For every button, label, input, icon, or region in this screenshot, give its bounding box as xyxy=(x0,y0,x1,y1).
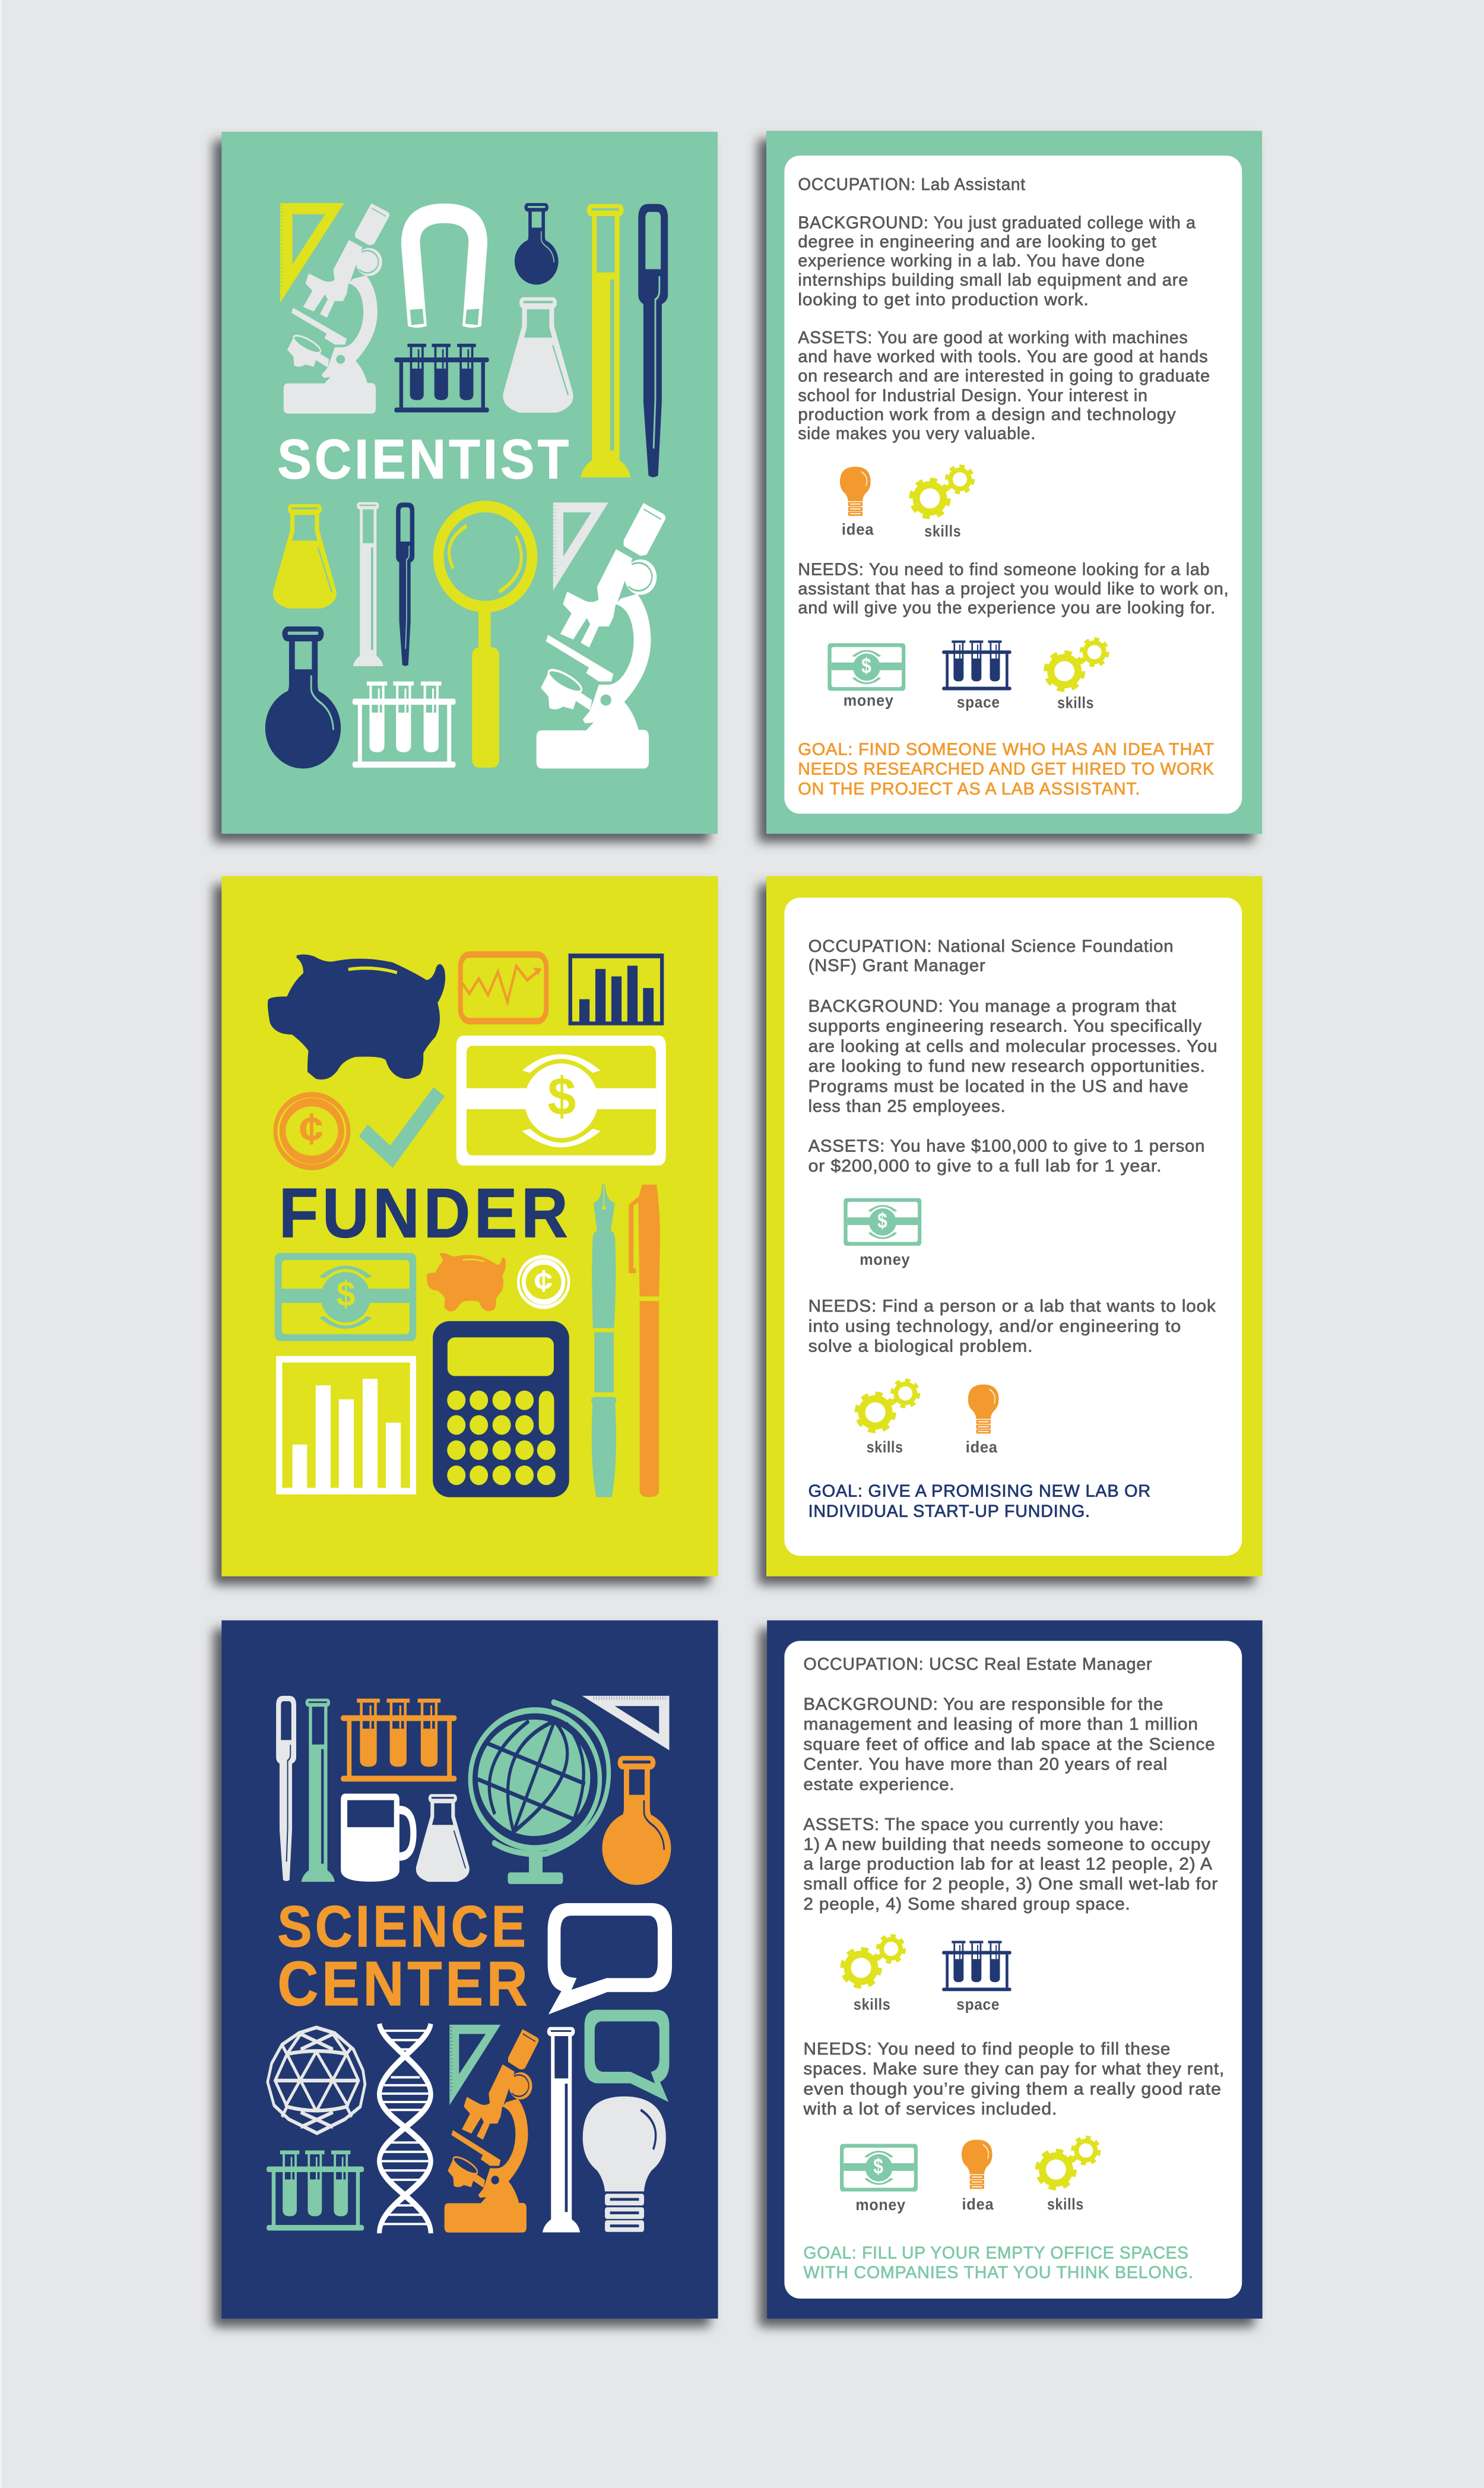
icon: money: $ xyxy=(877,1208,887,1233)
text block: occupation and background: (NSF) Grant Manager xyxy=(808,957,986,976)
text block: assets: side makes you very valuable. xyxy=(798,425,1036,444)
text block: occupation and background: internships building small lab equipment and are xyxy=(798,271,1188,290)
icon: small navy pipette xyxy=(396,502,414,666)
label: money: money xyxy=(844,691,894,709)
text block: needs: solve a biological problem. xyxy=(808,1338,1033,1356)
icon: teal bill xyxy=(275,1253,416,1341)
icon: teal bill: $ xyxy=(337,1274,355,1314)
icon: white microscope xyxy=(537,503,665,768)
text block: assets: ASSETS: You are good at working with machines xyxy=(798,329,1188,347)
text block: occupation and background: degree in engineering and are looking to get xyxy=(798,233,1157,251)
panel: science center role card xyxy=(759,1620,1263,2327)
text block: assets xyxy=(804,1816,1218,1914)
text block: occupation and background: OCCUPATION: UCSC Real Estate Manager xyxy=(804,1655,1152,1674)
label: idea: idea xyxy=(962,2195,994,2213)
icon: orange microscope xyxy=(445,2029,539,2233)
icon: orange coin xyxy=(275,1095,348,1167)
icon: magnifying glass xyxy=(433,501,537,768)
text block: occupation and background: OCCUPATION: Lab Assistant xyxy=(798,176,1026,194)
icon: small navy round flask xyxy=(515,203,559,284)
text block: occupation and background xyxy=(808,938,1218,1116)
icon: grey erlenmeyer flask xyxy=(416,1794,470,1882)
icon: marker xyxy=(629,1185,660,1497)
text block: needs: assistant that has a project you would like to work on, xyxy=(798,580,1229,599)
icon: lime set square xyxy=(280,203,344,303)
icon: money xyxy=(840,2144,918,2192)
text block: occupation and background: management and leasing of more than 1 million xyxy=(804,1715,1198,1734)
label: skills: skills xyxy=(867,1438,903,1456)
icon: grey erlenmeyer flask xyxy=(503,297,573,413)
text block: needs: with a lot of services included. xyxy=(803,2100,1057,2119)
icon: space rack xyxy=(942,641,1011,690)
icon: navy bar chart xyxy=(569,954,664,1025)
icon: teal graduated cylinder xyxy=(302,1699,335,1882)
text block: needs xyxy=(803,2040,1225,2119)
icon: orange piggy bank xyxy=(427,1253,506,1312)
panel: science center cover card xyxy=(214,1620,718,2327)
panel: funder cover card xyxy=(214,876,718,1585)
text block: occupation and background: supports engineering research. You specifically xyxy=(808,1018,1202,1036)
title: FUNDER xyxy=(279,1174,572,1252)
label: skills: skills xyxy=(1057,694,1094,711)
text block: goal: NEEDS RESEARCHED AND GET HIRED TO WORK xyxy=(798,761,1215,778)
text block: occupation and background: BACKGROUND: You just graduated college with a xyxy=(798,214,1196,232)
icon: skills gears xyxy=(1038,2138,1098,2188)
text block: assets: ASSETS: The space you currently you have: xyxy=(804,1816,1164,1834)
text block: assets: production work from a design and technology xyxy=(798,406,1176,424)
text block: needs: NEEDS: Find a person or a lab that wants to look xyxy=(808,1297,1216,1316)
label: space: space xyxy=(957,694,1000,711)
icon: money xyxy=(827,643,905,691)
label: skills: skills xyxy=(1047,2195,1084,2213)
text block: occupation and background: are looking at cells and molecular processes. You xyxy=(808,1037,1218,1056)
icon: idea bulb xyxy=(840,467,871,516)
icon: navy pipette xyxy=(638,204,668,477)
icon: white bill xyxy=(456,1036,666,1166)
text block: occupation and background: Programs must be located in the US and have xyxy=(808,1078,1189,1096)
text block: assets: 2 people, 4) Some shared group space. xyxy=(804,1895,1131,1914)
text block: assets: and have worked with tools. You are good at hands xyxy=(798,348,1208,366)
icon: money xyxy=(844,1198,921,1246)
icon: white bar chart xyxy=(276,1356,416,1495)
text block: occupation and background: estate experience. xyxy=(804,1775,955,1794)
icon: navy piggy bank xyxy=(268,954,445,1080)
text block: occupation and background: experience working in a lab. You have done xyxy=(798,252,1145,271)
icon: teal speech bubble xyxy=(585,2010,670,2102)
panel: scientist role card xyxy=(758,131,1262,842)
text block: goal: GOAL: FILL UP YOUR EMPTY OFFICE SPACES xyxy=(804,2245,1189,2262)
icon: teal test tube rack xyxy=(267,2151,364,2230)
label: money: money xyxy=(860,1251,910,1268)
icon: large navy round flask xyxy=(265,626,341,768)
icon: skills gears xyxy=(858,1381,918,1430)
icon: lime erlenmeyer flask xyxy=(273,504,337,609)
text block: needs xyxy=(798,561,1229,618)
text block: needs: NEEDS: You need to find someone looking for a lab xyxy=(798,561,1210,580)
icon: globe xyxy=(470,1702,608,1884)
text block: goal: GOAL: FIND SOMEONE WHO HAS AN IDEA THAT xyxy=(798,741,1215,759)
panel: funder role card xyxy=(758,876,1263,1585)
label: skills: skills xyxy=(854,1996,890,2013)
text block: assets: small office for 2 people, 3) One small wet-lab for xyxy=(804,1875,1218,1894)
text block: occupation and background: square feet of office and lab space at the Science xyxy=(804,1736,1216,1754)
icon: pipette xyxy=(276,1696,296,1881)
text block: needs: spaces. Make sure they can pay for what they rent, xyxy=(804,2060,1225,2079)
icon: grey light bulb xyxy=(583,2097,666,2232)
label: money: money xyxy=(855,2196,906,2214)
icon: navy test tube rack xyxy=(394,344,489,413)
text block: assets: 1) A new building that needs someone to occupy xyxy=(804,1836,1210,1854)
text block: needs: into using technology, and/or engineering to xyxy=(808,1318,1181,1336)
text block: occupation and background: less than 25 employees. xyxy=(808,1098,1006,1116)
text block: assets: a large production lab for at least 12 people, 2) A xyxy=(804,1856,1213,1873)
icon: space rack xyxy=(942,1941,1011,1991)
icon: orange test tube rack xyxy=(341,1699,456,1781)
icon: white speech bubble xyxy=(548,1903,672,2014)
label: idea: idea xyxy=(842,521,874,538)
text block: occupation and background: OCCUPATION: National Science Foundation xyxy=(808,938,1174,956)
icon: money: $ xyxy=(873,2154,883,2179)
text block: assets: school for Industrial Design. Your interest in xyxy=(798,387,1148,405)
icon: grey set square xyxy=(582,1696,670,1751)
icon: line chart xyxy=(461,954,546,1021)
text block: assets: or $200,000 to give to a full lab for 1 year. xyxy=(808,1157,1162,1176)
text block: occupation and background: are looking to fund new research opportunities. xyxy=(808,1058,1206,1076)
text block: goal xyxy=(798,741,1215,799)
icon: grey graduated cylinder xyxy=(353,502,383,666)
text block: goal xyxy=(808,1483,1151,1521)
label: space: space xyxy=(956,1996,1000,2013)
icon: coffee mug xyxy=(341,1794,413,1882)
text block: needs: and will give you the experience you are looking for. xyxy=(798,599,1216,618)
icon: DNA helix xyxy=(379,2024,431,2233)
icon: white test tube rack xyxy=(353,682,456,768)
icon: grey set square xyxy=(553,502,608,591)
text block: goal: INDIVIDUAL START-UP FUNDING. xyxy=(808,1502,1090,1521)
icon: skills gears xyxy=(912,467,972,516)
text block: occupation and background: Center. You have more than 20 years of real xyxy=(804,1756,1168,1774)
text block: assets: ASSETS: You have $100,000 to give to 1 person xyxy=(808,1137,1205,1156)
icon: skills gears xyxy=(844,1936,903,1986)
icon: lime graduated cylinder xyxy=(581,204,630,477)
icon: skills gears xyxy=(1047,640,1107,689)
text block: goal: GOAL: GIVE A PROMISING NEW LAB OR xyxy=(808,1483,1151,1501)
icon: white coin xyxy=(518,1257,569,1307)
text block: needs xyxy=(808,1297,1216,1356)
icon: white coin: ¢ xyxy=(534,1264,553,1298)
icon: orange coin: ¢ xyxy=(299,1104,324,1154)
text block: occupation and background xyxy=(804,1655,1216,1794)
icon: geodesic sphere xyxy=(268,2027,365,2133)
icon: orange round flask xyxy=(602,1756,671,1885)
text block: occupation and background: BACKGROUND: You manage a program that xyxy=(808,998,1177,1016)
text block: occupation and background xyxy=(798,176,1196,309)
text block: goal xyxy=(804,2245,1194,2282)
title: SCIENTIST xyxy=(277,429,572,490)
text block: occupation and background: BACKGROUND: You are responsible for the xyxy=(804,1695,1163,1714)
title xyxy=(277,1894,531,2019)
panel: scientist cover card xyxy=(214,132,718,842)
icon: fountain pen xyxy=(591,1183,617,1497)
title: SCIENCE xyxy=(277,1894,529,1960)
icon: teal set square xyxy=(449,2025,500,2105)
text block: goal: ON THE PROJECT AS A LAB ASSISTANT. xyxy=(798,780,1140,799)
icon: checkmark xyxy=(359,1087,445,1168)
text block: assets: on research and are interested in going to graduate xyxy=(798,367,1210,385)
icon: grey microscope xyxy=(284,203,389,414)
icon: idea bulb xyxy=(962,2139,992,2189)
label: skills: skills xyxy=(924,523,961,540)
icon: calculator xyxy=(433,1321,569,1497)
text block: goal: WITH COMPANIES THAT YOU THINK BELONG. xyxy=(804,2264,1194,2282)
icon: horseshoe magnet xyxy=(401,204,487,328)
text block: occupation and background: looking to get into production work. xyxy=(798,291,1089,309)
text block: needs: even though you’re giving them a really good rate xyxy=(804,2080,1222,2098)
label: idea: idea xyxy=(966,1438,998,1456)
title: CENTER xyxy=(277,1948,531,2019)
text block: assets xyxy=(798,329,1210,444)
icon: money: $ xyxy=(861,653,871,678)
text block: assets xyxy=(808,1137,1205,1176)
icon: white graduated cylinder xyxy=(543,2027,580,2232)
text block: needs: NEEDS: You need to find people to fill these xyxy=(804,2040,1171,2059)
icon: idea bulb xyxy=(968,1385,998,1433)
icon: white bill: $ xyxy=(548,1066,576,1126)
